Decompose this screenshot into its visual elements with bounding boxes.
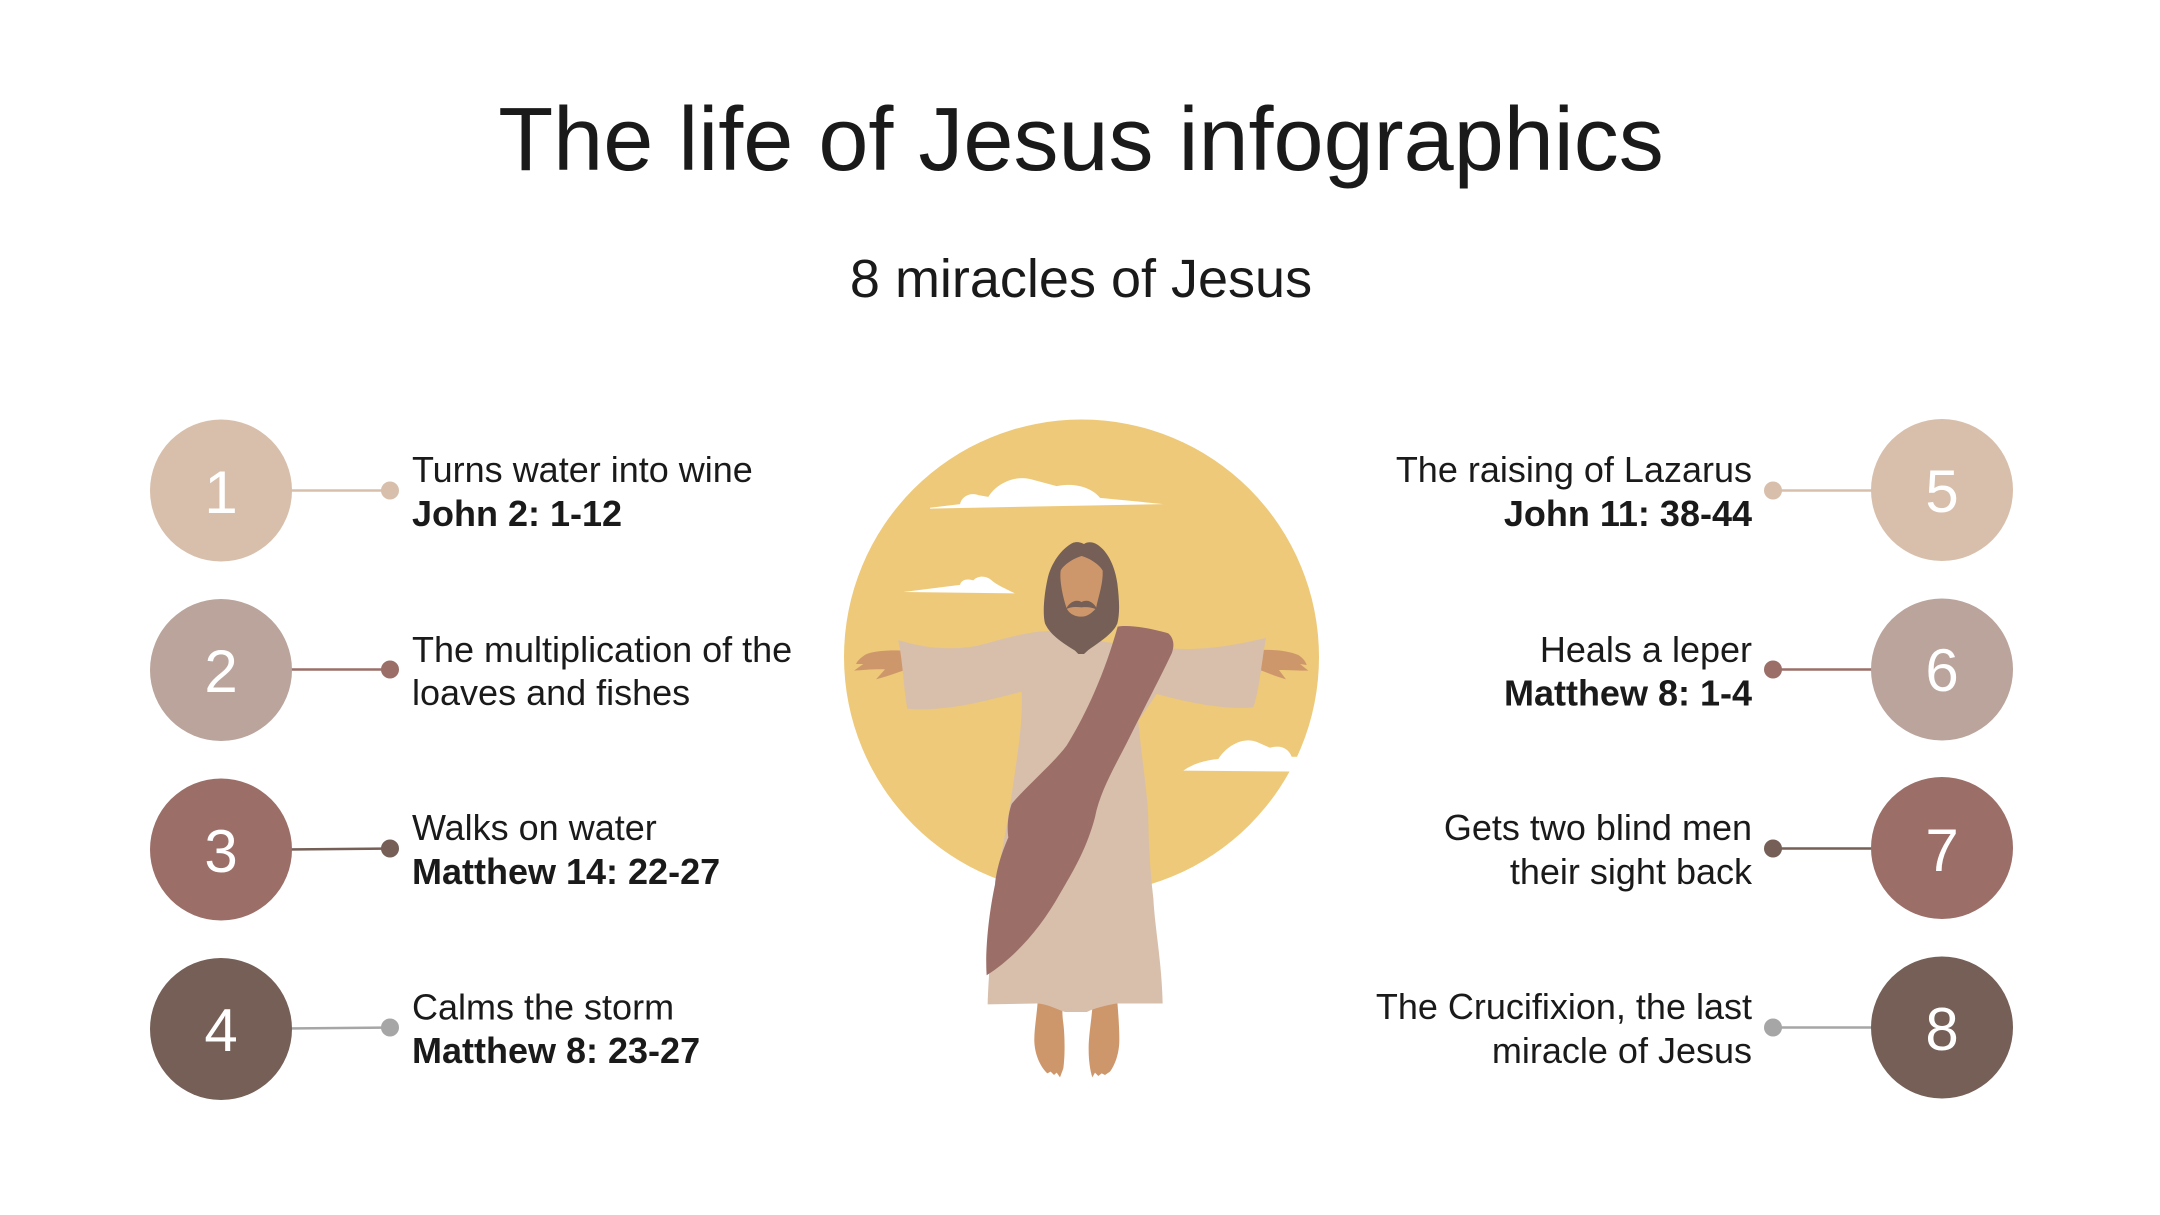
text 6 [1504, 629, 1752, 714]
text 5 [1396, 449, 1752, 534]
hair and beard [1044, 542, 1119, 654]
number badge 8 [1871, 956, 2013, 1098]
connector 4 [285, 1018, 399, 1036]
number badge 3: 3 [204, 818, 238, 885]
number badge 6: 6 [1925, 637, 1959, 704]
connector 3 [285, 840, 399, 858]
number badge 7: 7 [1925, 817, 1959, 884]
text 6: Matthew 8: 1-4 [1504, 672, 1752, 714]
text 1 [412, 449, 753, 534]
text 2: The multiplication of the [412, 629, 792, 670]
item 7 [1444, 777, 2013, 919]
item 4 [150, 958, 700, 1100]
central illustration: Jesus with sun [844, 420, 1319, 1077]
number badge 5 [1871, 419, 2013, 561]
text 7: Gets two blind men [1444, 807, 1752, 848]
item 1 [150, 420, 753, 562]
number badge 1 [150, 420, 292, 562]
text 2 [412, 629, 792, 713]
number badge 6 [1871, 598, 2013, 740]
text 3: Walks on water [412, 807, 657, 848]
moustache [1066, 601, 1097, 610]
text 4: Calms the storm [412, 986, 674, 1028]
item 8 [1376, 956, 2013, 1098]
number badge 2: 2 [204, 638, 238, 705]
cloud: left [903, 577, 1015, 593]
connector 2 [285, 660, 399, 678]
subtitle: 8 miracles of Jesus [850, 249, 1312, 309]
text 5: The raising of Lazarus [1396, 449, 1752, 490]
left hand [854, 650, 903, 679]
text 7 [1444, 807, 1753, 892]
text 3 [412, 807, 720, 892]
text 4 [412, 986, 700, 1071]
text 8: miracle of Jesus [1492, 1030, 1752, 1071]
text 4: Matthew 8: 23-27 [412, 1030, 700, 1071]
face [1060, 556, 1103, 617]
left foot [1034, 1002, 1065, 1077]
cloud: top [930, 478, 1163, 509]
text 8 [1376, 986, 1752, 1071]
text 6: Heals a leper [1540, 629, 1752, 670]
text 3: Matthew 14: 22-27 [412, 851, 720, 892]
number badge 2 [150, 599, 292, 741]
number badge 7 [1871, 777, 2013, 919]
item 2 [150, 599, 792, 741]
item 6 [1504, 598, 2013, 740]
number badge 8: 8 [1925, 996, 1959, 1063]
text 2: loaves and fishes [412, 672, 690, 713]
connector 6 [1764, 660, 1880, 678]
sash [986, 626, 1173, 975]
right hand [1260, 650, 1308, 679]
title: The life of Jesus infographics [498, 90, 1664, 190]
text 1: John 2: 1-12 [412, 493, 622, 534]
connector 8 [1764, 1018, 1880, 1036]
right foot [1089, 1002, 1119, 1077]
text 8: The Crucifixion, the last [1376, 986, 1752, 1027]
sun circle [844, 420, 1319, 894]
number badge 1: 1 [204, 459, 238, 526]
item 5 [1396, 419, 2013, 561]
number badge 4: 4 [204, 997, 238, 1064]
item 3 [150, 778, 720, 920]
text 7: their sight back [1510, 851, 1753, 892]
number badge 4 [150, 958, 292, 1100]
connector 5 [1764, 482, 1880, 500]
number badge 3 [150, 778, 292, 920]
text 1: Turns water into wine [412, 449, 753, 490]
connector 1 [285, 482, 399, 500]
robe [898, 631, 1266, 1012]
text 5: John 11: 38-44 [1504, 493, 1752, 534]
connector 7 [1764, 840, 1880, 858]
number badge 5: 5 [1925, 458, 1959, 525]
cloud: right [1183, 740, 1298, 772]
